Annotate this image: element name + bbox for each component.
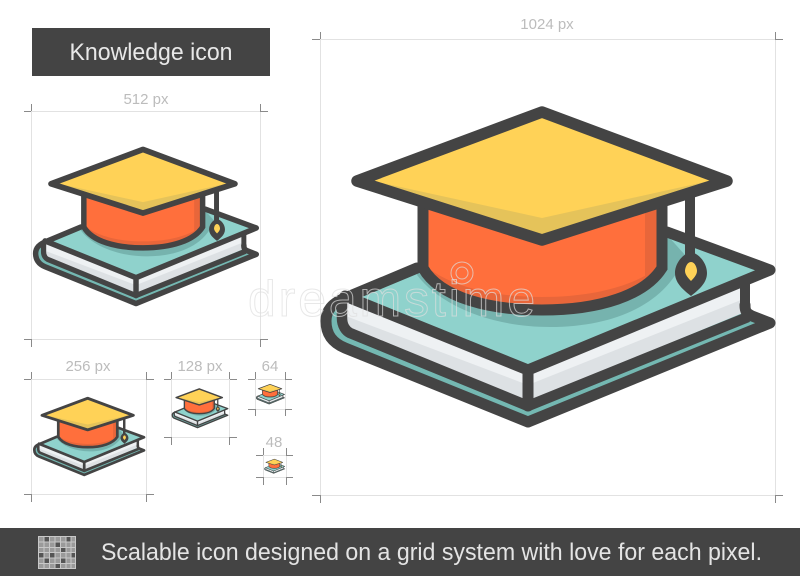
size frame: 48 px: 48 <box>266 434 282 451</box>
size frame: 48 px <box>256 434 293 485</box>
size frame: 64 px <box>248 358 292 416</box>
footer tagline: Scalable icon designed on a grid system with love for each pixel. <box>101 539 762 566</box>
title banner <box>32 28 270 76</box>
size frame: 1024 px: 1024 px <box>520 16 574 33</box>
icon: pixel grid <box>38 536 76 569</box>
icon: graduation cap on book, 512 px <box>36 149 256 304</box>
icon: graduation cap on book, 48 px <box>264 459 285 473</box>
footer bar <box>0 528 800 576</box>
title banner: Knowledge icon <box>70 39 232 66</box>
size frame: 512 px <box>24 91 268 347</box>
size frame: 64 px: 64 <box>262 358 278 375</box>
icon: graduation cap on book, 128 px <box>172 389 228 428</box>
size frame: 128 px <box>164 358 237 445</box>
size frame: 256 px: 256 px <box>65 358 111 375</box>
icon: graduation cap on book, 64 px <box>256 384 285 404</box>
icon: graduation cap on book, 1024 px <box>326 112 770 422</box>
icon: graduation cap on book, 256 px <box>34 398 144 475</box>
watermark: dreamstime <box>248 271 535 327</box>
size frame: 256 px <box>24 358 154 502</box>
size frame: 512 px: 512 px <box>123 91 169 108</box>
size frame: 128 px: 128 px <box>177 358 223 375</box>
